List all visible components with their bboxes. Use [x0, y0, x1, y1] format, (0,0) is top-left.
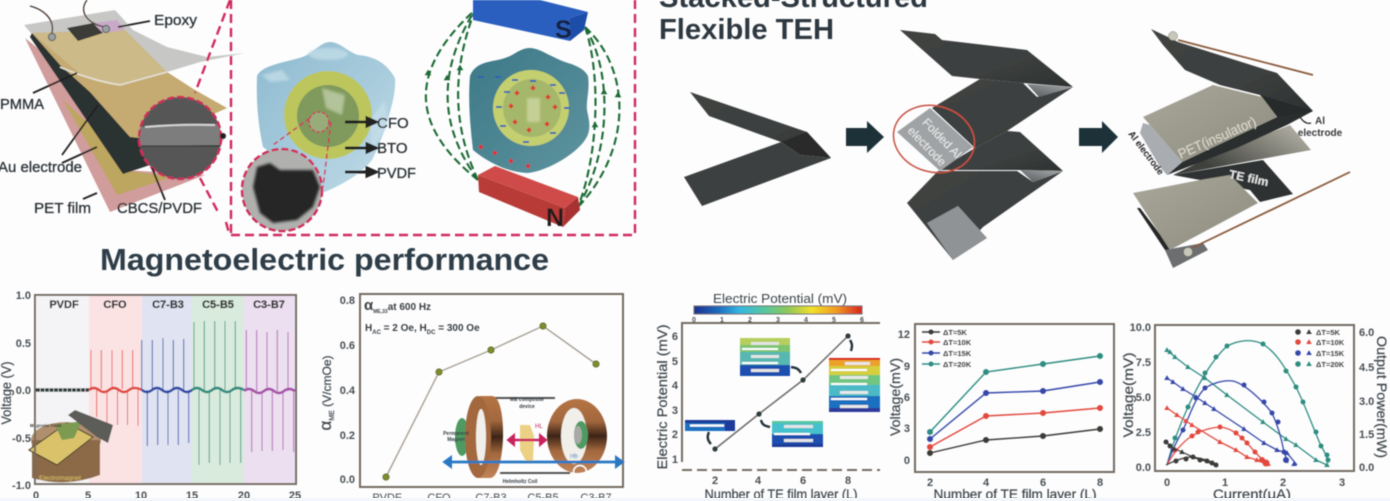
inset: Helmholtz coil setup: [443, 396, 623, 485]
label Au electrode: Au electrode: [0, 159, 82, 176]
legend: ΔT=5K: [943, 328, 968, 337]
y tick labels: [340, 295, 356, 486]
band labels: PVDF: [49, 299, 79, 311]
y tick labels: [672, 331, 679, 466]
red power points: [1172, 424, 1270, 466]
color bar ticks: 3: [776, 317, 780, 324]
callout: dashed zoom box: [195, 0, 636, 235]
y tick labels: 0.0: [340, 474, 355, 486]
matrix facets: [262, 48, 388, 150]
polarised core: [503, 79, 561, 137]
label PET film: PET film: [34, 200, 91, 217]
trace PVDF: [36, 388, 89, 392]
S magnet: [473, 0, 588, 44]
red voltage points: [1164, 405, 1271, 466]
inset: electromagnet: Electromagnet: [39, 475, 81, 482]
x tick labels: 2: [1280, 477, 1286, 489]
right y tick labels: 6.0: [1359, 327, 1374, 339]
heading: Magnetoelectric performance: Magnetoelectric performance: [100, 242, 549, 277]
x tick labels: 3: [1339, 477, 1345, 489]
y tick labels: 5: [672, 356, 678, 368]
y tick labels: 3: [672, 405, 678, 417]
inset: Helmholtz coil setup: ME composite: [510, 397, 544, 403]
annotation: frequency: ME,33: [373, 309, 388, 315]
highlight ellipse: [886, 97, 982, 181]
legend: ΔT=5K: [1316, 328, 1341, 337]
y tick labels: 12: [898, 329, 910, 341]
annotation: fields: = 2 Oe, H: [381, 323, 427, 334]
label Al electrode right: Al: [1315, 116, 1325, 127]
band labels: C3-B7: [253, 299, 285, 311]
x tick labels: [33, 490, 301, 501]
upper wire: [1178, 40, 1313, 75]
PVDF matrix: [257, 42, 395, 193]
band labels: C5-B5: [202, 299, 234, 311]
PMMA film behind: [24, 10, 245, 85]
y axis title: ME: [329, 410, 336, 421]
y tick labels: [898, 329, 910, 467]
blue voltage curve: [1167, 378, 1297, 465]
polarised BTO shell: [493, 70, 569, 146]
N magnet: N: [546, 204, 564, 232]
axes frame: [360, 294, 623, 487]
black points: [1164, 440, 1218, 468]
x tick labels: 1: [1222, 477, 1228, 489]
inset: Helmholtz coil setup: Hb: [570, 454, 578, 460]
x tick labels: 8: [1097, 477, 1103, 489]
CFO arrow: [345, 118, 376, 126]
panel: folded stack with electrode: [886, 30, 1073, 260]
lower PET leaf: [1173, 125, 1311, 175]
y tick labels: 1.0: [16, 290, 31, 302]
x tick labels: 8: [845, 475, 851, 487]
blue power points: [1170, 382, 1289, 463]
y tick labels: 0.4: [340, 385, 356, 397]
series 20K: [928, 354, 1102, 434]
lead wires: [30, 0, 105, 33]
panel: single folded TE film: [684, 92, 831, 206]
inset: 2 layers: [685, 420, 735, 431]
dark strip below PET: [1167, 111, 1313, 175]
PET film layer: [25, 38, 205, 212]
axes frame: [682, 323, 880, 462]
panel: core-shell particle: [242, 42, 416, 231]
trace C3-B7: [244, 330, 295, 452]
legend: ΔT=10K: [1316, 338, 1345, 347]
field lines: [426, 10, 619, 207]
epoxy patch: [93, 20, 125, 33]
left y tick labels: 2.5: [1136, 427, 1151, 439]
inset: Helmholtz coil setup: Permanent: [443, 431, 469, 437]
right y tick labels: [1359, 327, 1374, 474]
teal power points: [1172, 342, 1330, 462]
contact balls: [48, 25, 110, 41]
left y tick labels: [1130, 322, 1151, 474]
y tick labels: 9: [904, 361, 910, 373]
x tick labels: 6: [800, 475, 806, 487]
left y tick labels: 10.0: [1130, 322, 1151, 334]
series 10K: [928, 406, 1102, 450]
y tick labels: -0.5: [12, 433, 31, 445]
TE film segment: [1173, 160, 1293, 202]
color bar ticks: 4: [804, 317, 808, 324]
left y axis title: Voltage(mV): [1120, 352, 1136, 438]
axes frame: [1155, 325, 1354, 471]
contact pad: [67, 23, 103, 41]
BTO shell: [284, 71, 372, 159]
label Al electrode right: [1298, 116, 1343, 139]
series 15K: [928, 380, 1102, 442]
data line: [386, 326, 596, 477]
y axis title: (V/cmOe): [320, 356, 334, 410]
legend: [922, 328, 972, 369]
left y tick labels: 5.0: [1136, 392, 1151, 404]
inset: 6 layers: [740, 338, 790, 376]
annotation: fields: AC: [372, 330, 382, 336]
y tick labels: 0.8: [340, 295, 355, 307]
top fold: [1260, 95, 1313, 123]
legend: ΔT=20K: [943, 360, 972, 369]
axes frame: [915, 324, 1114, 472]
right y tick labels: 0.0: [1359, 462, 1374, 474]
y tick labels: [12, 290, 31, 492]
teal voltage points: [1164, 347, 1330, 467]
legend: [1295, 328, 1345, 369]
PVDF arrow: [345, 168, 376, 176]
inset: Helmholtz coil setup: device: [519, 404, 535, 410]
right y tick labels: 3.0: [1359, 396, 1374, 408]
dashed zoom marker: [273, 118, 331, 187]
legend: ΔT=15K: [943, 349, 972, 358]
upper Au electrode: [32, 30, 227, 138]
highlight: [322, 88, 345, 115]
S magnet: S: [555, 16, 572, 44]
color bar ticks: 6: [860, 317, 864, 324]
N magnet: [478, 166, 580, 232]
x tick labels: 2: [927, 477, 933, 489]
color bar title: Electric Potential (mV): [713, 291, 847, 306]
x tick labels: [927, 477, 1103, 489]
minus charges: [478, 77, 570, 142]
x tick labels: 0: [1164, 477, 1170, 489]
red voltage curve: [1167, 408, 1270, 465]
teal voltage curve: [1167, 350, 1327, 465]
field arrowheads: [425, 65, 621, 127]
label PMMA: PMMA: [0, 96, 44, 113]
bottom left strip: [1137, 208, 1172, 250]
upper PET leaf: [1143, 85, 1277, 162]
label PET(insulator): PET(insulator): [1175, 113, 1259, 162]
folded Al electrode: Folded Al: [919, 115, 964, 161]
x tick labels: [1164, 477, 1345, 489]
panel: layered ME device schematic: [0, 0, 245, 217]
SEM cross section inset: [139, 97, 226, 179]
core highlight: [527, 98, 540, 122]
arrow: step one: [846, 121, 884, 153]
legend: ΔT=15K: [1316, 349, 1345, 358]
band labels: C7-B3: [152, 299, 184, 311]
inset: Helmholtz coil setup: HL: [535, 424, 543, 430]
PMMA translucent overlay: [32, 30, 167, 85]
inset: electromagnet: [29, 410, 113, 482]
PMMA edge: [60, 67, 167, 85]
label Epoxy: Epoxy: [154, 12, 198, 29]
black curves: [1166, 442, 1217, 466]
bottom PET leaf: [1133, 175, 1258, 250]
right y tick labels: 1.5: [1359, 429, 1374, 441]
legend: ΔT=10K: [943, 338, 972, 347]
x tick labels: 2: [712, 475, 718, 487]
chart: voltage versus time: [0, 290, 301, 501]
callout arrows: [708, 340, 852, 444]
left y tick labels: 0.0: [1136, 462, 1151, 474]
label CBCS/PVDF: CBCS/PVDF: [117, 200, 202, 217]
panel: particle in magnetic field: [425, 0, 621, 232]
x tick labels: 6: [1040, 477, 1046, 489]
y axis title: Electric Potential (mV): [654, 324, 670, 470]
annotation: fields: DC: [427, 330, 436, 336]
y tick labels: 0.2: [340, 430, 355, 442]
y axis title: α: [316, 420, 335, 430]
legend: ΔT=20K: [1316, 360, 1345, 369]
top TE film: [1151, 29, 1313, 111]
y tick labels: 1: [672, 454, 678, 466]
y axis title: Voltage(mV): [887, 358, 903, 436]
left Al electrode: [1140, 123, 1182, 175]
x tick labels: [372, 492, 612, 501]
inset: Helmholtz coil setup: Helmholtz Coil: [503, 479, 538, 485]
y tick labels: 4: [672, 380, 679, 392]
axes frame: [35, 295, 296, 484]
y tick labels: 0.6: [340, 340, 355, 352]
heading: Stacked-Structured Flexible TEH: Flexible TEH: [659, 14, 834, 46]
CBCS/PVDF black layer: [30, 33, 224, 174]
colored sample bands: [36, 295, 295, 484]
blue voltage points: [1164, 375, 1297, 466]
blue power curve: [1167, 381, 1288, 465]
right y tick labels: 4.5: [1359, 362, 1374, 374]
polarised composite: [469, 48, 589, 173]
color bar ticks: 2: [748, 317, 752, 324]
inset: electromagnet: Magnetic Field: [30, 423, 62, 428]
color bar ticks: 5: [832, 317, 836, 324]
inset: 4 layers: [772, 421, 823, 447]
leader: Al electrode: [1300, 117, 1311, 123]
y tick labels: 2: [672, 429, 678, 441]
x tick labels: 4: [755, 475, 762, 487]
trace C7-B3: [142, 338, 192, 446]
trace C5-B5: [192, 321, 244, 465]
heading: Stacked-Structured Flexible TEH: [659, 0, 928, 46]
data points: [383, 323, 599, 480]
CFO core: [297, 85, 359, 147]
label Al electrode left: Al electrode: [1126, 129, 1166, 177]
chart: ME coefficient: [316, 294, 623, 501]
left y tick labels: 7.5: [1136, 357, 1151, 369]
leader lines: [33, 21, 165, 200]
chart: voltage versus layers: [887, 324, 1114, 501]
terminal balls: [1168, 32, 1192, 256]
annotation: frequency: α: [364, 297, 374, 314]
label CFO: CFO: [377, 115, 409, 132]
y tick labels: -1.0: [12, 480, 31, 492]
annotation: fields: H: [365, 323, 372, 334]
label TE film: TE film: [1228, 167, 1270, 189]
band labels: CFO: [103, 299, 127, 311]
label Al electrode right: electrode: [1298, 128, 1343, 139]
annotation: fields: = 300 Oe: [435, 323, 480, 334]
band labels: [49, 299, 285, 311]
right y axis title: Output Power(mW): [1374, 336, 1390, 458]
color bar: [694, 306, 862, 314]
bottom electrode: [1165, 243, 1208, 268]
chart: voltage and power versus current: [1120, 322, 1390, 501]
teal power curve: [1167, 341, 1328, 465]
dashed circle: [309, 112, 329, 132]
y tick labels: 6: [904, 392, 910, 404]
trace CFO: [89, 350, 142, 426]
panel: assembled stacked TEH: [1126, 29, 1350, 268]
BTO arrow: [345, 144, 376, 152]
color bar ticks: 1: [720, 317, 724, 324]
inset: 8 layers: [829, 358, 880, 412]
lower Al electrode: [927, 206, 987, 260]
plus charges: [478, 86, 558, 168]
color bar ticks: [692, 317, 864, 324]
folded Al electrode: [897, 108, 973, 171]
lower wire: [1192, 172, 1350, 248]
red power curve: [1167, 427, 1267, 465]
x tick labels: 4: [983, 477, 990, 489]
data points: [712, 333, 851, 452]
y tick labels: 6: [672, 331, 678, 343]
label BTO: BTO: [377, 140, 408, 157]
TEM image inset: [242, 149, 322, 231]
color bar ticks: 0: [692, 317, 696, 324]
x tick labels: [712, 475, 851, 487]
label PVDF: PVDF: [377, 165, 416, 182]
annotation: frequency: at 600 Hz: [388, 302, 431, 313]
y tick labels: 0.5: [16, 338, 31, 350]
arrow: step two: [1079, 121, 1118, 153]
data line: [715, 336, 848, 449]
chart: electric potential versus layers: [654, 291, 880, 501]
y tick labels: 0.0: [16, 385, 31, 397]
folded Al electrode: electrode: [905, 124, 949, 169]
inset: Helmholtz coil setup: Magnet: [447, 437, 465, 443]
series 5K: [928, 426, 1102, 456]
y tick labels: 3: [904, 423, 910, 435]
y tick labels: 0: [904, 455, 910, 467]
lower gold electrode: [63, 100, 172, 195]
